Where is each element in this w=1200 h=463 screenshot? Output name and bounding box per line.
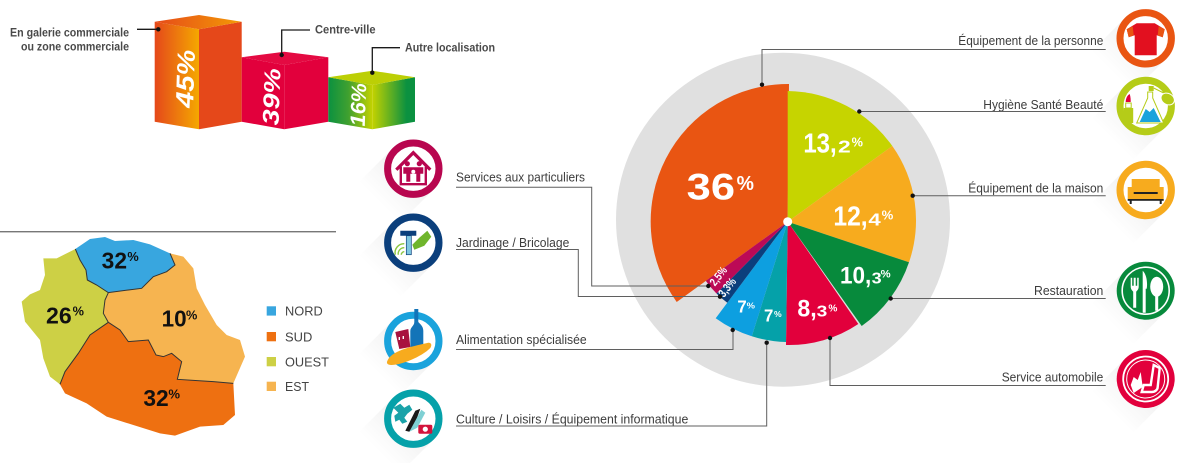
region: Ouest 26%: 26 bbox=[46, 302, 72, 328]
bar: 16% autre localisation: 16% bbox=[347, 83, 371, 127]
callout: Culture / Loisirs / Équipement informatique bbox=[456, 340, 769, 426]
callout: Culture / Loisirs / Équipement informatique: Culture / Loisirs / Équipement informatique bbox=[456, 411, 688, 426]
value: 36%: 36 bbox=[687, 165, 735, 207]
label: En galerie commerciale bbox=[10, 26, 160, 54]
icon: culture loisirs bbox=[359, 393, 439, 463]
bar chart: localisation bbox=[155, 15, 415, 129]
map: La Réunion bbox=[22, 237, 245, 436]
callout: Alimentation spécialisée bbox=[456, 328, 735, 350]
icon: alimentation spécialisée bbox=[359, 309, 439, 395]
value: 36% bbox=[687, 165, 754, 207]
slice: 7% Alimentation bbox=[716, 222, 788, 336]
label: En galerie commerciale: En galerie commerciale bbox=[10, 26, 129, 40]
icon: jardinage bricolage bbox=[359, 217, 439, 297]
value: 8,3%: 3 bbox=[817, 304, 827, 321]
label: Autre localisation bbox=[370, 40, 495, 75]
value: 8,3%: % bbox=[828, 304, 837, 315]
value: 12,4% bbox=[833, 201, 893, 232]
value: 12,4%: 4 bbox=[868, 210, 881, 230]
slice: 36% Équipement de la personne bbox=[651, 84, 789, 302]
callout: Hygiène Santé Beauté bbox=[857, 98, 1106, 114]
bar: 45% galerie commerciale: 45% bbox=[171, 49, 201, 109]
legend: regions bbox=[267, 304, 329, 394]
callout: Jardinage / Bricolage bbox=[456, 236, 722, 299]
value: 8,3% bbox=[797, 296, 837, 323]
region: Nord 32%: % bbox=[127, 250, 139, 264]
slice: 12,4% Équipement de la maison bbox=[788, 146, 916, 262]
icon: service automobile bbox=[1091, 350, 1175, 433]
value: 12,4%: 12, bbox=[833, 201, 868, 232]
region: Ouest 26% bbox=[22, 249, 108, 384]
value: 3,3%: 3,3% bbox=[715, 275, 739, 300]
callout: Service automobile: Service automobile bbox=[1002, 371, 1103, 385]
callout: Services aux particuliers bbox=[456, 171, 710, 288]
value: 10,3% bbox=[840, 262, 891, 289]
callout: Restauration: Restauration bbox=[1034, 284, 1103, 298]
legend item: Sud: SUD bbox=[285, 330, 312, 345]
region: Sud 32%: 32 bbox=[143, 385, 169, 411]
legend item: Ouest: OUEST bbox=[285, 354, 329, 370]
callout: Équipement de la personne bbox=[760, 33, 1106, 87]
icon: équipement de la maison bbox=[1091, 164, 1171, 244]
callout: Restauration bbox=[888, 284, 1106, 301]
value: 7% blue: 7 bbox=[737, 297, 747, 317]
callout: Service automobile bbox=[828, 336, 1106, 386]
slice: 2,5% Services bbox=[706, 222, 788, 294]
pie chart: secteurs bbox=[651, 84, 916, 345]
label: Centre-ville bbox=[280, 22, 376, 57]
slice: 7% Culture bbox=[752, 222, 788, 342]
callout: Jardinage / Bricolage: Jardinage / Bricolage bbox=[456, 236, 569, 250]
region: Sud 32%: % bbox=[168, 387, 180, 401]
region: Est 10% bbox=[103, 253, 245, 383]
value: 7% blue: % bbox=[747, 302, 755, 311]
pie labels bbox=[687, 128, 893, 326]
value: 10,3%: 10, bbox=[840, 262, 871, 289]
value: 13,2%: % bbox=[852, 135, 863, 149]
bar: 16% autre localisation bbox=[328, 71, 415, 129]
legend item: Nord: NORD bbox=[285, 304, 323, 319]
label: Autre localisation: Autre localisation bbox=[405, 40, 495, 54]
value: 10,3%: % bbox=[881, 268, 891, 280]
region: Est 10%: 10 bbox=[162, 306, 187, 332]
region: Nord 32%: 32 bbox=[102, 247, 127, 273]
icon: équipement de la personne bbox=[1091, 13, 1171, 93]
callout: Équipement de la personne: Équipement de la personne bbox=[958, 33, 1103, 48]
label: En galerie commerciale: ou zone commerciale bbox=[21, 40, 129, 54]
slice: 8,3% Service automobile bbox=[786, 222, 858, 345]
slice: 10,3% Restauration bbox=[788, 222, 909, 326]
value: 10,3%: 3 bbox=[872, 270, 882, 287]
slice: 3,3% Jardinage bbox=[716, 222, 788, 303]
icon: services aux particuliers bbox=[359, 143, 439, 223]
value: 7% teal: % bbox=[774, 310, 782, 319]
bar: 39% centre-ville bbox=[242, 52, 328, 129]
value: 7% teal bbox=[764, 306, 782, 326]
value: 13,2%: 2 bbox=[838, 137, 851, 157]
region: Ouest 26%: % bbox=[73, 305, 84, 319]
centre dot bbox=[783, 217, 792, 226]
value: 2,5%: 2,5% bbox=[708, 265, 730, 289]
icon: hygiène santé beauté bbox=[1091, 80, 1177, 160]
callout: Services aux particuliers: Services aux particuliers bbox=[456, 171, 585, 185]
value: 36%: % bbox=[737, 173, 754, 195]
label: Centre-ville: Centre-ville bbox=[315, 22, 376, 36]
bar: 45% galerie commerciale bbox=[155, 15, 242, 129]
pie chart: backdrop disc bbox=[616, 53, 950, 387]
value: 13,2% bbox=[803, 128, 863, 159]
slice: 13,2% Hygiène Santé Beauté bbox=[788, 91, 892, 222]
region: Sud 32% bbox=[60, 322, 235, 436]
callout: Équipement de la maison bbox=[910, 181, 1106, 198]
callout: Équipement de la maison: Équipement de la maison bbox=[968, 181, 1103, 196]
value: 12,4%: % bbox=[882, 209, 893, 223]
legend item: Est: EST bbox=[285, 379, 309, 394]
value: 8,3%: 8, bbox=[797, 296, 817, 323]
region: Nord 32% bbox=[75, 237, 175, 293]
value: 7% teal: 7 bbox=[764, 306, 773, 326]
region: Est 10%: % bbox=[186, 308, 197, 322]
callout: Hygiène Santé Beauté: Hygiène Santé Beauté bbox=[983, 98, 1103, 112]
value: 7% blue bbox=[737, 297, 755, 317]
bar: 39% centre-ville: 39% bbox=[258, 68, 285, 126]
value: 13,2%: 13, bbox=[803, 128, 837, 159]
callout: Alimentation spécialisée: Alimentation spécialisée bbox=[456, 333, 587, 347]
icon: restauration bbox=[1091, 262, 1175, 345]
